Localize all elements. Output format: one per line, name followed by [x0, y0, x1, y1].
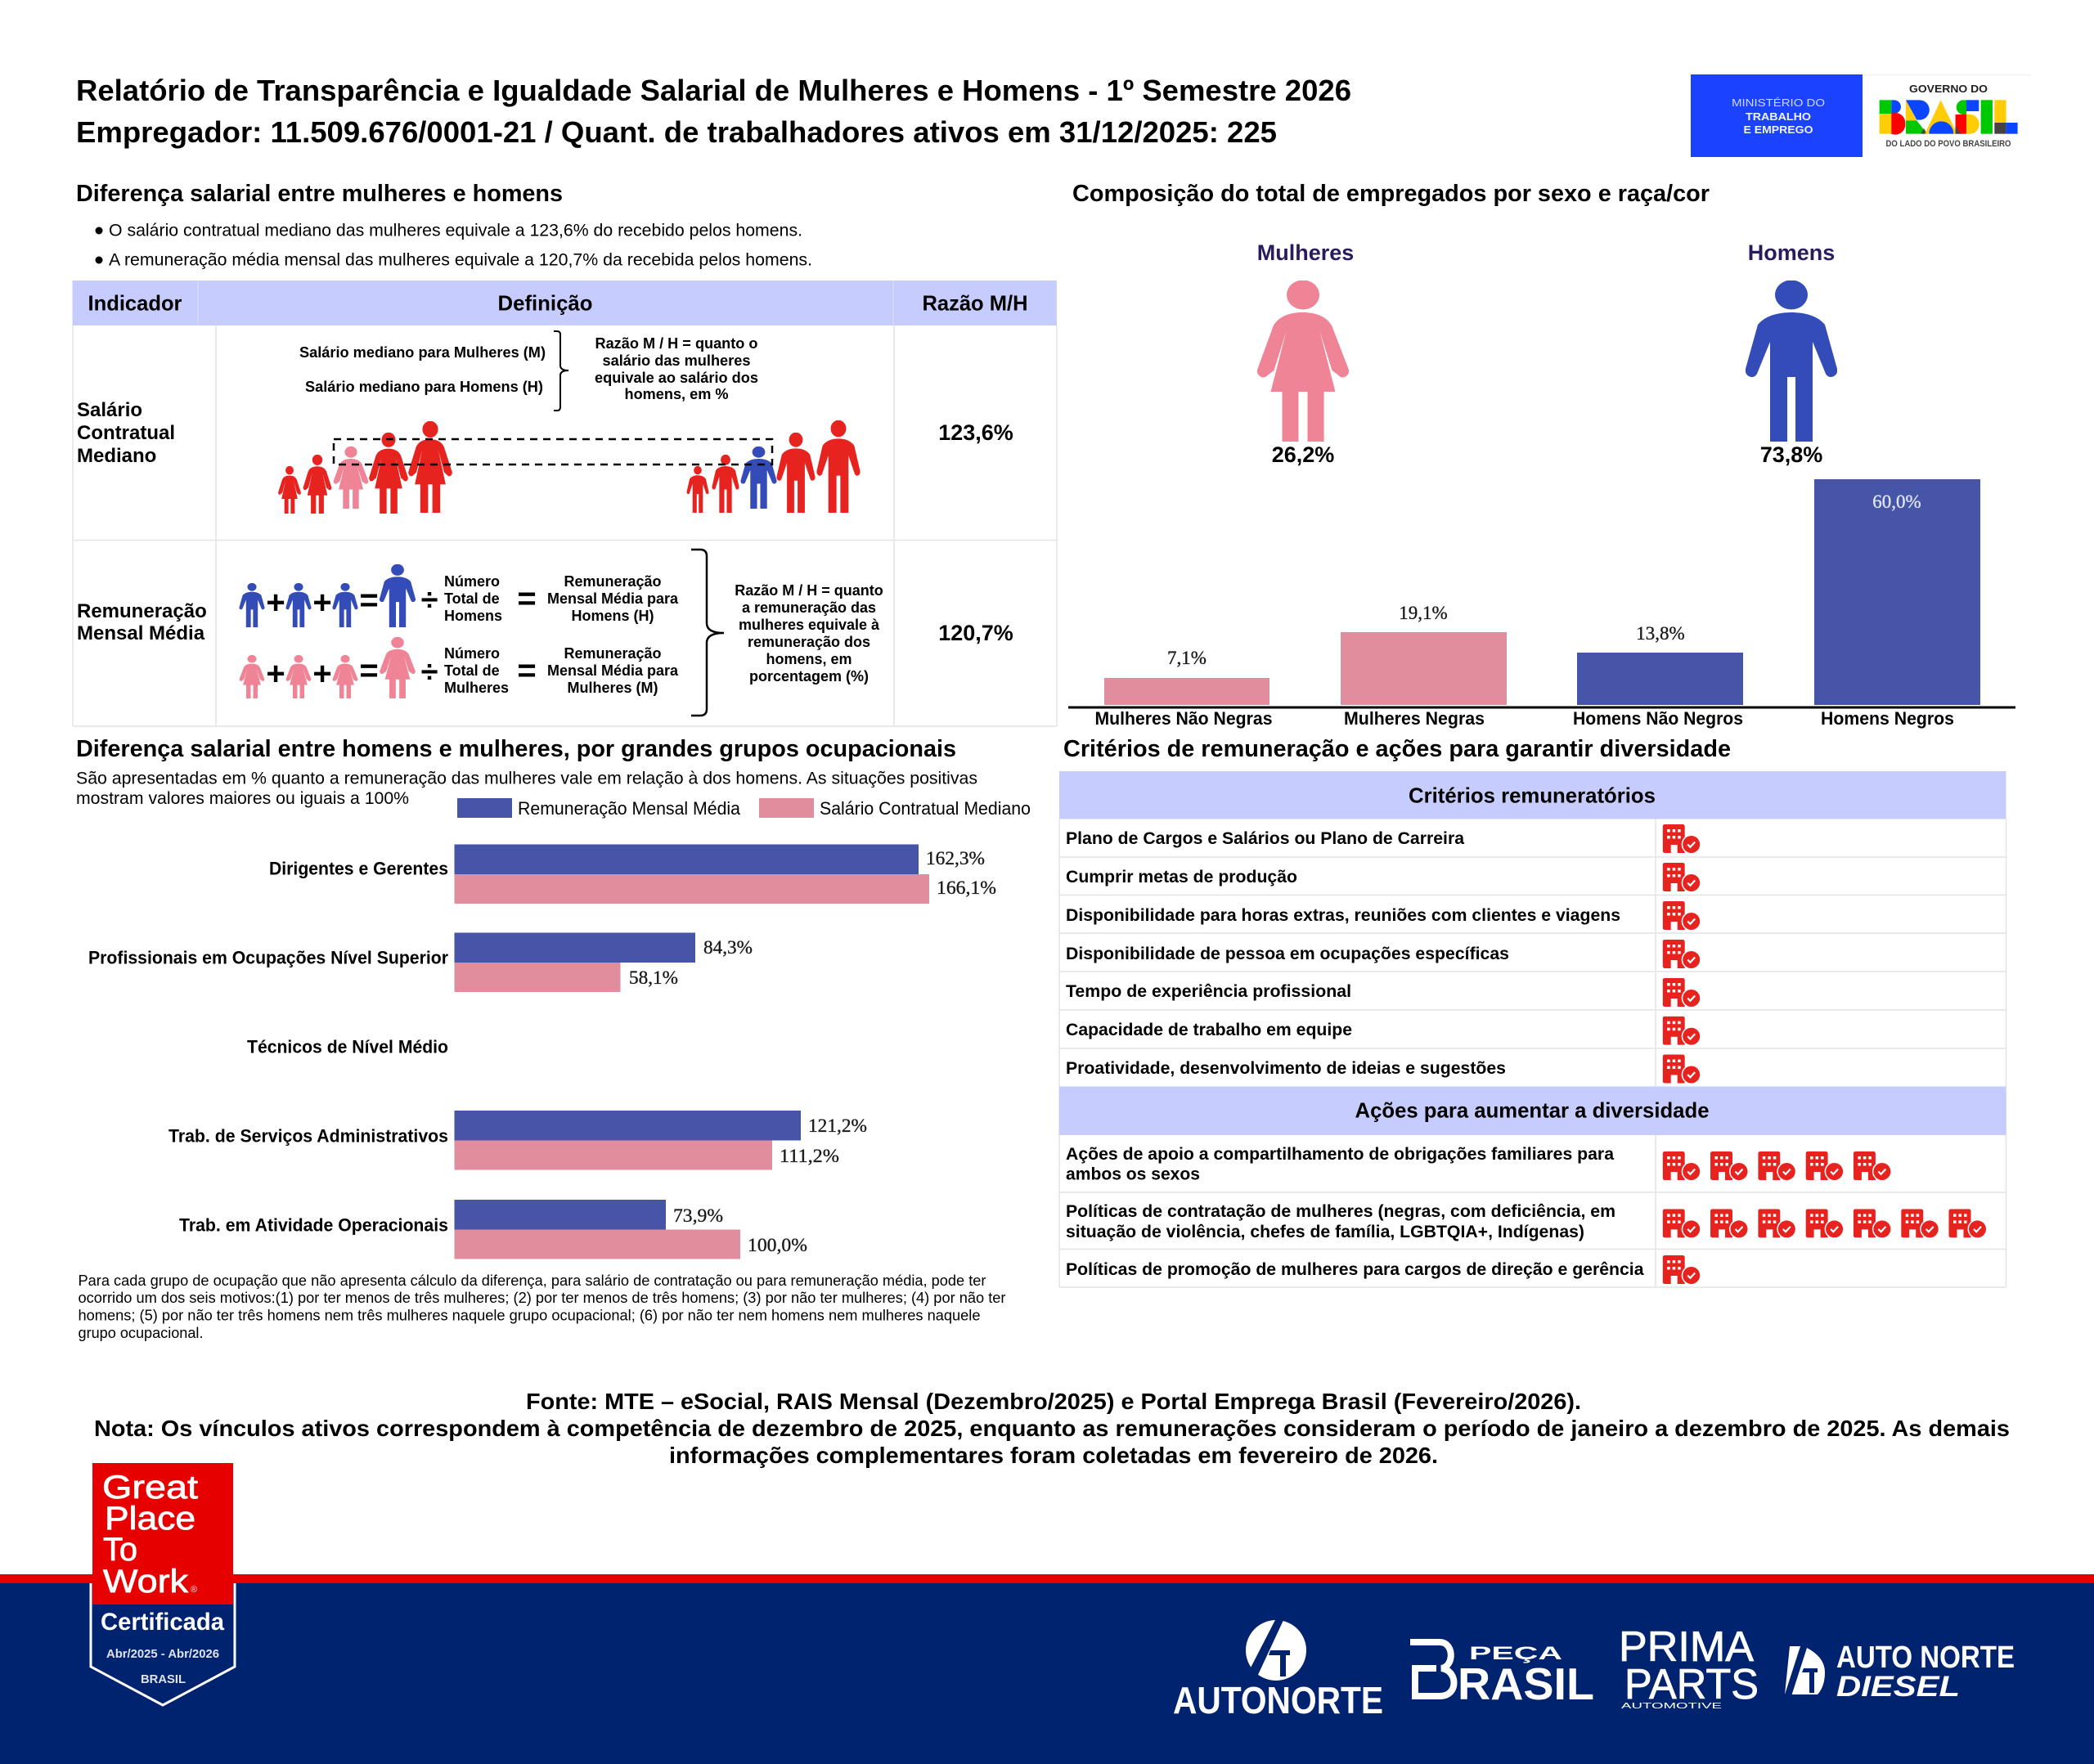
row: Disponibilidade horas extras — [1066, 901, 1701, 931]
legend — [457, 798, 1031, 819]
section header: Ações: Ações para aumentar a diversidade — [1355, 1097, 1710, 1122]
icon: man — [1746, 280, 1837, 442]
chart description: São apresentadas em % quanto a remuneração das mulheres vale em relação à dos homens. As situações positivas — [76, 769, 977, 788]
title — [76, 74, 1351, 149]
ratio definition: porcentagem (%) — [749, 668, 869, 685]
badge: Great Place To Work: Abr/2025 - Abr/2026 — [106, 1647, 219, 1661]
badge: Great Place To Work: BRASIL — [141, 1672, 186, 1686]
icon: women median figures — [278, 421, 452, 514]
equation: women: Total de — [444, 662, 500, 679]
ratio definition: homens, em — [766, 651, 852, 667]
summary bullets: O salário contratual mediano das mulheres equivale a 123,6% do recebido pelos homens. — [109, 221, 802, 240]
table header: Indicador — [88, 291, 182, 316]
badge: Great Place To Work: To — [103, 1532, 137, 1568]
chart description: mostram valores maiores ou iguais a 100% — [76, 789, 409, 808]
row: Políticas de promoção — [1066, 1255, 1701, 1286]
row: Políticas de contratação: Políticas de contratação de mulheres (negras, com deficiência, em — [1066, 1202, 1615, 1221]
bar chart: occupational groups — [88, 844, 996, 1259]
bar: Mulheres Não Negras — [1094, 648, 1273, 729]
logo: Prima Parts: AUTOMOTIVE — [1621, 1702, 1723, 1711]
source note: Fonte: MTE – eSocial, RAIS Mensal (Dezembro/2025) e Portal Emprega Brasil (Fevereiro/2026). — [526, 1389, 1581, 1414]
row: Remuneração Mensal Média: Remuneração — [77, 600, 207, 622]
row: Tempo de experiência: Tempo de experiência profissional — [1066, 982, 1351, 1001]
panel: men share: 73,8% — [1760, 442, 1822, 467]
group: Serviços Administrativos: 121,2% — [808, 1115, 867, 1136]
heading: Critérios: Critérios de remuneração e ações para garantir diversidade — [1063, 736, 1731, 762]
row: Salário Contratual Mediano — [77, 331, 1013, 514]
equation: women: Mulheres (M) — [567, 680, 658, 696]
group: Atividade Operacionais: 100,0% — [748, 1235, 807, 1255]
source note: informações complementares foram coletadas em fevereiro de 2026. — [669, 1443, 1438, 1468]
bar: Mulheres Negras — [1341, 603, 1507, 729]
brace — [554, 331, 568, 411]
row: Proatividade — [1066, 1055, 1701, 1084]
group: Profissionais: 84,3% — [703, 937, 753, 958]
table grid — [73, 325, 1057, 726]
ratio definition: homens, em % — [625, 386, 728, 402]
logo: Peça Brasil: PEÇA — [1469, 1643, 1562, 1663]
bar: Homens Negros: 60,0% — [1872, 491, 1921, 512]
ratio definition — [735, 582, 883, 685]
group: Dirigentes e Gerentes: 162,3% — [926, 848, 985, 869]
panel: indicator table — [72, 281, 1057, 726]
heading: Diferença salarial entre mulheres e homens: Diferença salarial entre mulheres e homens — [76, 181, 563, 207]
equation: men: Número — [444, 573, 500, 590]
section header: Ações — [1059, 1086, 2006, 1135]
badge: Great Place To Work: Place — [105, 1501, 195, 1537]
row: Ações de apoio — [1066, 1145, 1892, 1184]
ratio definition: remuneração dos — [748, 634, 870, 650]
panel: women share: Mulheres — [1257, 240, 1354, 265]
badge: Great Place To Work: Certificada — [101, 1609, 224, 1636]
section header: Critérios remuneratórios — [1059, 771, 2006, 819]
table grid — [1059, 819, 2006, 1287]
ratio definition: mulheres equivale à — [739, 617, 880, 633]
footer band — [0, 1574, 2094, 1764]
logo: Ministério do Trabalho e Emprego: E EMPREGO — [1744, 124, 1813, 136]
group: Serviços Administrativos — [169, 1111, 867, 1169]
row: Remuneração Mensal Média: 120,7% — [938, 621, 1013, 645]
logo: Prima Parts — [1619, 1623, 1759, 1711]
logo: Prima Parts: PARTS — [1624, 1661, 1759, 1708]
source note — [94, 1389, 2010, 1468]
row: Capacidade: Capacidade de trabalho em equipe — [1066, 1021, 1352, 1039]
row: Ações de apoio: ambos os sexos — [1066, 1165, 1200, 1184]
equation: men: = — [517, 581, 537, 617]
footnote: grupo ocupacional. — [79, 1325, 203, 1341]
legend: Remuneração Mensal Média — [518, 798, 741, 819]
equation: women: + — [312, 656, 332, 692]
badge: Great Place To Work: Great — [102, 1470, 198, 1506]
row: Salário Contratual Mediano: Contratual — [77, 422, 175, 444]
equation: women: Remuneração — [564, 645, 662, 662]
panel: men share: Homens — [1748, 240, 1835, 265]
logo: Prima Parts: PRIMA — [1619, 1623, 1754, 1671]
group: Atividade Operacionais: 73,9% — [673, 1205, 723, 1226]
bar: Mulheres Não Negras: 7,1% — [1167, 648, 1207, 668]
row: Políticas de contratação: situação de violência, chefes de família, LGBTQIA+, Indígenas) — [1066, 1223, 1584, 1241]
ratio definition: Razão M / H = quanto o — [595, 335, 757, 352]
equation: women: Mensal Média para — [547, 662, 679, 679]
logo: Auto Norte — [1173, 1618, 1383, 1721]
row: Plano de Cargos — [1066, 824, 1701, 854]
logo: Auto Norte Diesel: DIESEL — [1836, 1671, 1960, 1703]
equation: men: ÷ — [421, 583, 438, 617]
equation: women: = — [359, 653, 379, 689]
equation: women: ÷ — [421, 655, 438, 689]
bar: Homens Não Negros: Homens Não Negros — [1573, 708, 1743, 729]
heading: Composição: Composição do total de empregados por sexo e raça/cor — [1072, 181, 1710, 207]
ratio definition: salário das mulheres — [602, 352, 751, 369]
bar chart: composition by race — [1068, 479, 2015, 729]
table header — [72, 281, 1057, 325]
equation: men: Homens (H) — [571, 608, 654, 624]
bar: Homens Negros — [1814, 479, 1980, 729]
summary bullets — [95, 221, 812, 270]
group: Profissionais: 58,1% — [629, 967, 678, 988]
row: Capacidade — [1066, 1017, 1701, 1046]
brace — [691, 550, 724, 716]
ratio definition — [595, 335, 758, 402]
bar: Mulheres Não Negras: Mulheres Não Negras — [1094, 708, 1273, 729]
equation: men: + — [266, 585, 285, 621]
equation: women — [240, 637, 679, 698]
logo: Ministério do Trabalho e Emprego: TRABALHO — [1746, 111, 1811, 123]
logo: Peça Brasil — [1410, 1642, 1594, 1709]
source note: Nota: Os vínculos ativos correspondem à competência de dezembro de 2025, enquanto as remunerações consideram o período de janeiro a dezembro de 2025. As demais — [94, 1416, 2010, 1441]
equation: men: Remuneração — [564, 573, 662, 590]
panel: men share — [1746, 240, 1837, 467]
row: Cumprir metas — [1066, 863, 1701, 893]
row: Disponibilidade de pessoa — [1066, 940, 1701, 970]
dashed median box — [334, 439, 772, 465]
row: Plano de Cargos: Plano de Cargos e Salários ou Plano de Carreira — [1066, 829, 1464, 848]
row: Políticas de promoção: Políticas de promoção de mulheres para cargos de direção e gerência — [1066, 1260, 1644, 1279]
footnote: ocorrido um dos seis motivos:(1) por ter menos de três mulheres; (2) por ter menos de três homens; (3) por não ter mulheres; (4) por não ter — [79, 1290, 1006, 1306]
bar: Homens Negros: Homens Negros — [1821, 708, 1954, 729]
equation: women: Número — [444, 645, 500, 662]
logo: Ministério do Trabalho e Emprego — [1691, 74, 1863, 157]
group: Serviços Administrativos: 111,2% — [780, 1146, 839, 1166]
row: Políticas de contratação — [1066, 1202, 1988, 1241]
title: Empregador: 11.509.676/0001-21 / Quant. de trabalhadores ativos em 31/12/2025: 225 — [76, 115, 1277, 149]
row: Proatividade: Proatividade, desenvolvimento de ideias e sugestões — [1066, 1059, 1506, 1078]
row: Disponibilidade horas extras: Disponibilidade para horas extras, reuniões com clientes e viagens — [1066, 906, 1620, 925]
bar: Mulheres Negras: Mulheres Negras — [1344, 708, 1485, 729]
table header: Definição — [497, 291, 592, 316]
title: Relatório de Transparência e Igualdade Salarial de Mulheres e Homens - 1º Semestre 2026 — [76, 74, 1351, 107]
group: Dirigentes e Gerentes — [269, 844, 996, 904]
group: Serviços Administrativos: Trab. de Serviços Administrativos — [169, 1125, 448, 1147]
equation: men: Total de — [444, 590, 500, 607]
chart description — [76, 769, 977, 808]
icon: woman — [1257, 280, 1349, 442]
heading: Diferença por grupos ocupacionais: Diferença salarial entre homens e mulheres, por grandes grupos ocupacionais — [76, 736, 956, 762]
panel: women share: 26,2% — [1272, 442, 1334, 467]
panel: women share — [1257, 240, 1354, 467]
equation: women: + — [266, 656, 285, 692]
bar: Homens Não Negros — [1573, 623, 1743, 729]
row: Cumprir metas: Cumprir metas de produção — [1066, 868, 1297, 886]
icon: men median figures — [686, 420, 861, 513]
legend: Salário Contratual Mediano — [820, 798, 1031, 819]
logo: Peça Brasil: RASIL — [1458, 1659, 1594, 1709]
equation: men: + — [312, 585, 332, 621]
group: Técnicos: Técnicos de Nível Médio — [247, 1037, 448, 1057]
group: Dirigentes e Gerentes: 166,1% — [937, 878, 996, 898]
logo: Governo do Brasil — [1863, 74, 2031, 149]
badge: Great Place To Work — [91, 1463, 235, 1705]
equation: men: Homens — [444, 608, 502, 624]
row: Disponibilidade de pessoa: Disponibilidade de pessoa em ocupações específicas — [1066, 945, 1509, 963]
logo: Auto Norte Diesel: AUTO NORTE — [1836, 1641, 2015, 1675]
group: Atividade Operacionais: Trab. em Atividade Operacionais — [179, 1215, 448, 1235]
equation: men — [239, 564, 679, 627]
group: Profissionais — [88, 932, 753, 992]
logo: Auto Norte: AUTONORTE — [1173, 1679, 1383, 1721]
footnote: Para cada grupo de ocupação que não apresenta cálculo da diferença, para salário de contratação ou para remuneração média, pode ter — [79, 1273, 986, 1289]
row: Salário Contratual Mediano: Mediano — [77, 445, 156, 467]
table header: Razão M/H — [923, 291, 1027, 316]
section header: Critérios remuneratórios: Critérios remuneratórios — [1409, 783, 1656, 808]
group: Dirigentes e Gerentes: Dirigentes e Gerentes — [269, 859, 448, 878]
equation: men: = — [359, 582, 379, 618]
row: Salário Contratual Mediano: 123,6% — [938, 420, 1013, 445]
badge: Great Place To Work: ® — [191, 1585, 197, 1595]
row: Remuneração Mensal Média — [77, 550, 1013, 716]
row: Salário Contratual Mediano: Salário mediano para Homens (H) — [305, 379, 543, 395]
group: Profissionais: Profissionais em Ocupações Nível Superior — [88, 947, 448, 968]
row: Salário Contratual Mediano: Salário mediano para Mulheres (M) — [299, 344, 546, 361]
badge: Great Place To Work: Work — [103, 1564, 189, 1600]
logo: Auto Norte Diesel — [1785, 1641, 2015, 1703]
logo: Ministério do Trabalho e Emprego: MINISTÉRIO DO — [1732, 97, 1825, 109]
ratio definition: Razão M / H = quanto — [735, 582, 883, 599]
row: Ações de apoio: Ações de apoio a compartilhamento de obrigações familiares para — [1066, 1145, 1614, 1164]
row: Tempo de experiência — [1066, 978, 1701, 1008]
footnote: homens; (5) por não ter três homens nem três mulheres naquele grupo ocupacional; (6) por não ter nem homens nem mulheres naquele — [79, 1307, 980, 1323]
logo: Governo do Brasil: DO LADO DO POVO BRASILEIRO — [1886, 139, 2011, 149]
footnote — [79, 1273, 1006, 1341]
equation: women: Mulheres — [444, 680, 509, 696]
bar: Mulheres Negras: 19,1% — [1399, 603, 1448, 623]
panel: criteria and actions table — [1059, 771, 2006, 1287]
group: Atividade Operacionais — [179, 1200, 807, 1259]
row: Remuneração Mensal Média: Mensal Média — [77, 622, 205, 644]
equation: women: = — [517, 653, 537, 689]
summary bullets: A remuneração média mensal das mulheres equivale a 120,7% da recebida pelos homens. — [109, 250, 812, 270]
equation: men: Mensal Média para — [547, 590, 679, 607]
bar: Homens Não Negros: 13,8% — [1636, 623, 1685, 644]
ratio definition: equivale ao salário dos — [595, 370, 758, 386]
row: Salário Contratual Mediano: Salário — [77, 399, 142, 421]
logo: Governo do Brasil: GOVERNO DO — [1909, 83, 1988, 95]
ratio definition: a remuneração das — [742, 599, 876, 616]
